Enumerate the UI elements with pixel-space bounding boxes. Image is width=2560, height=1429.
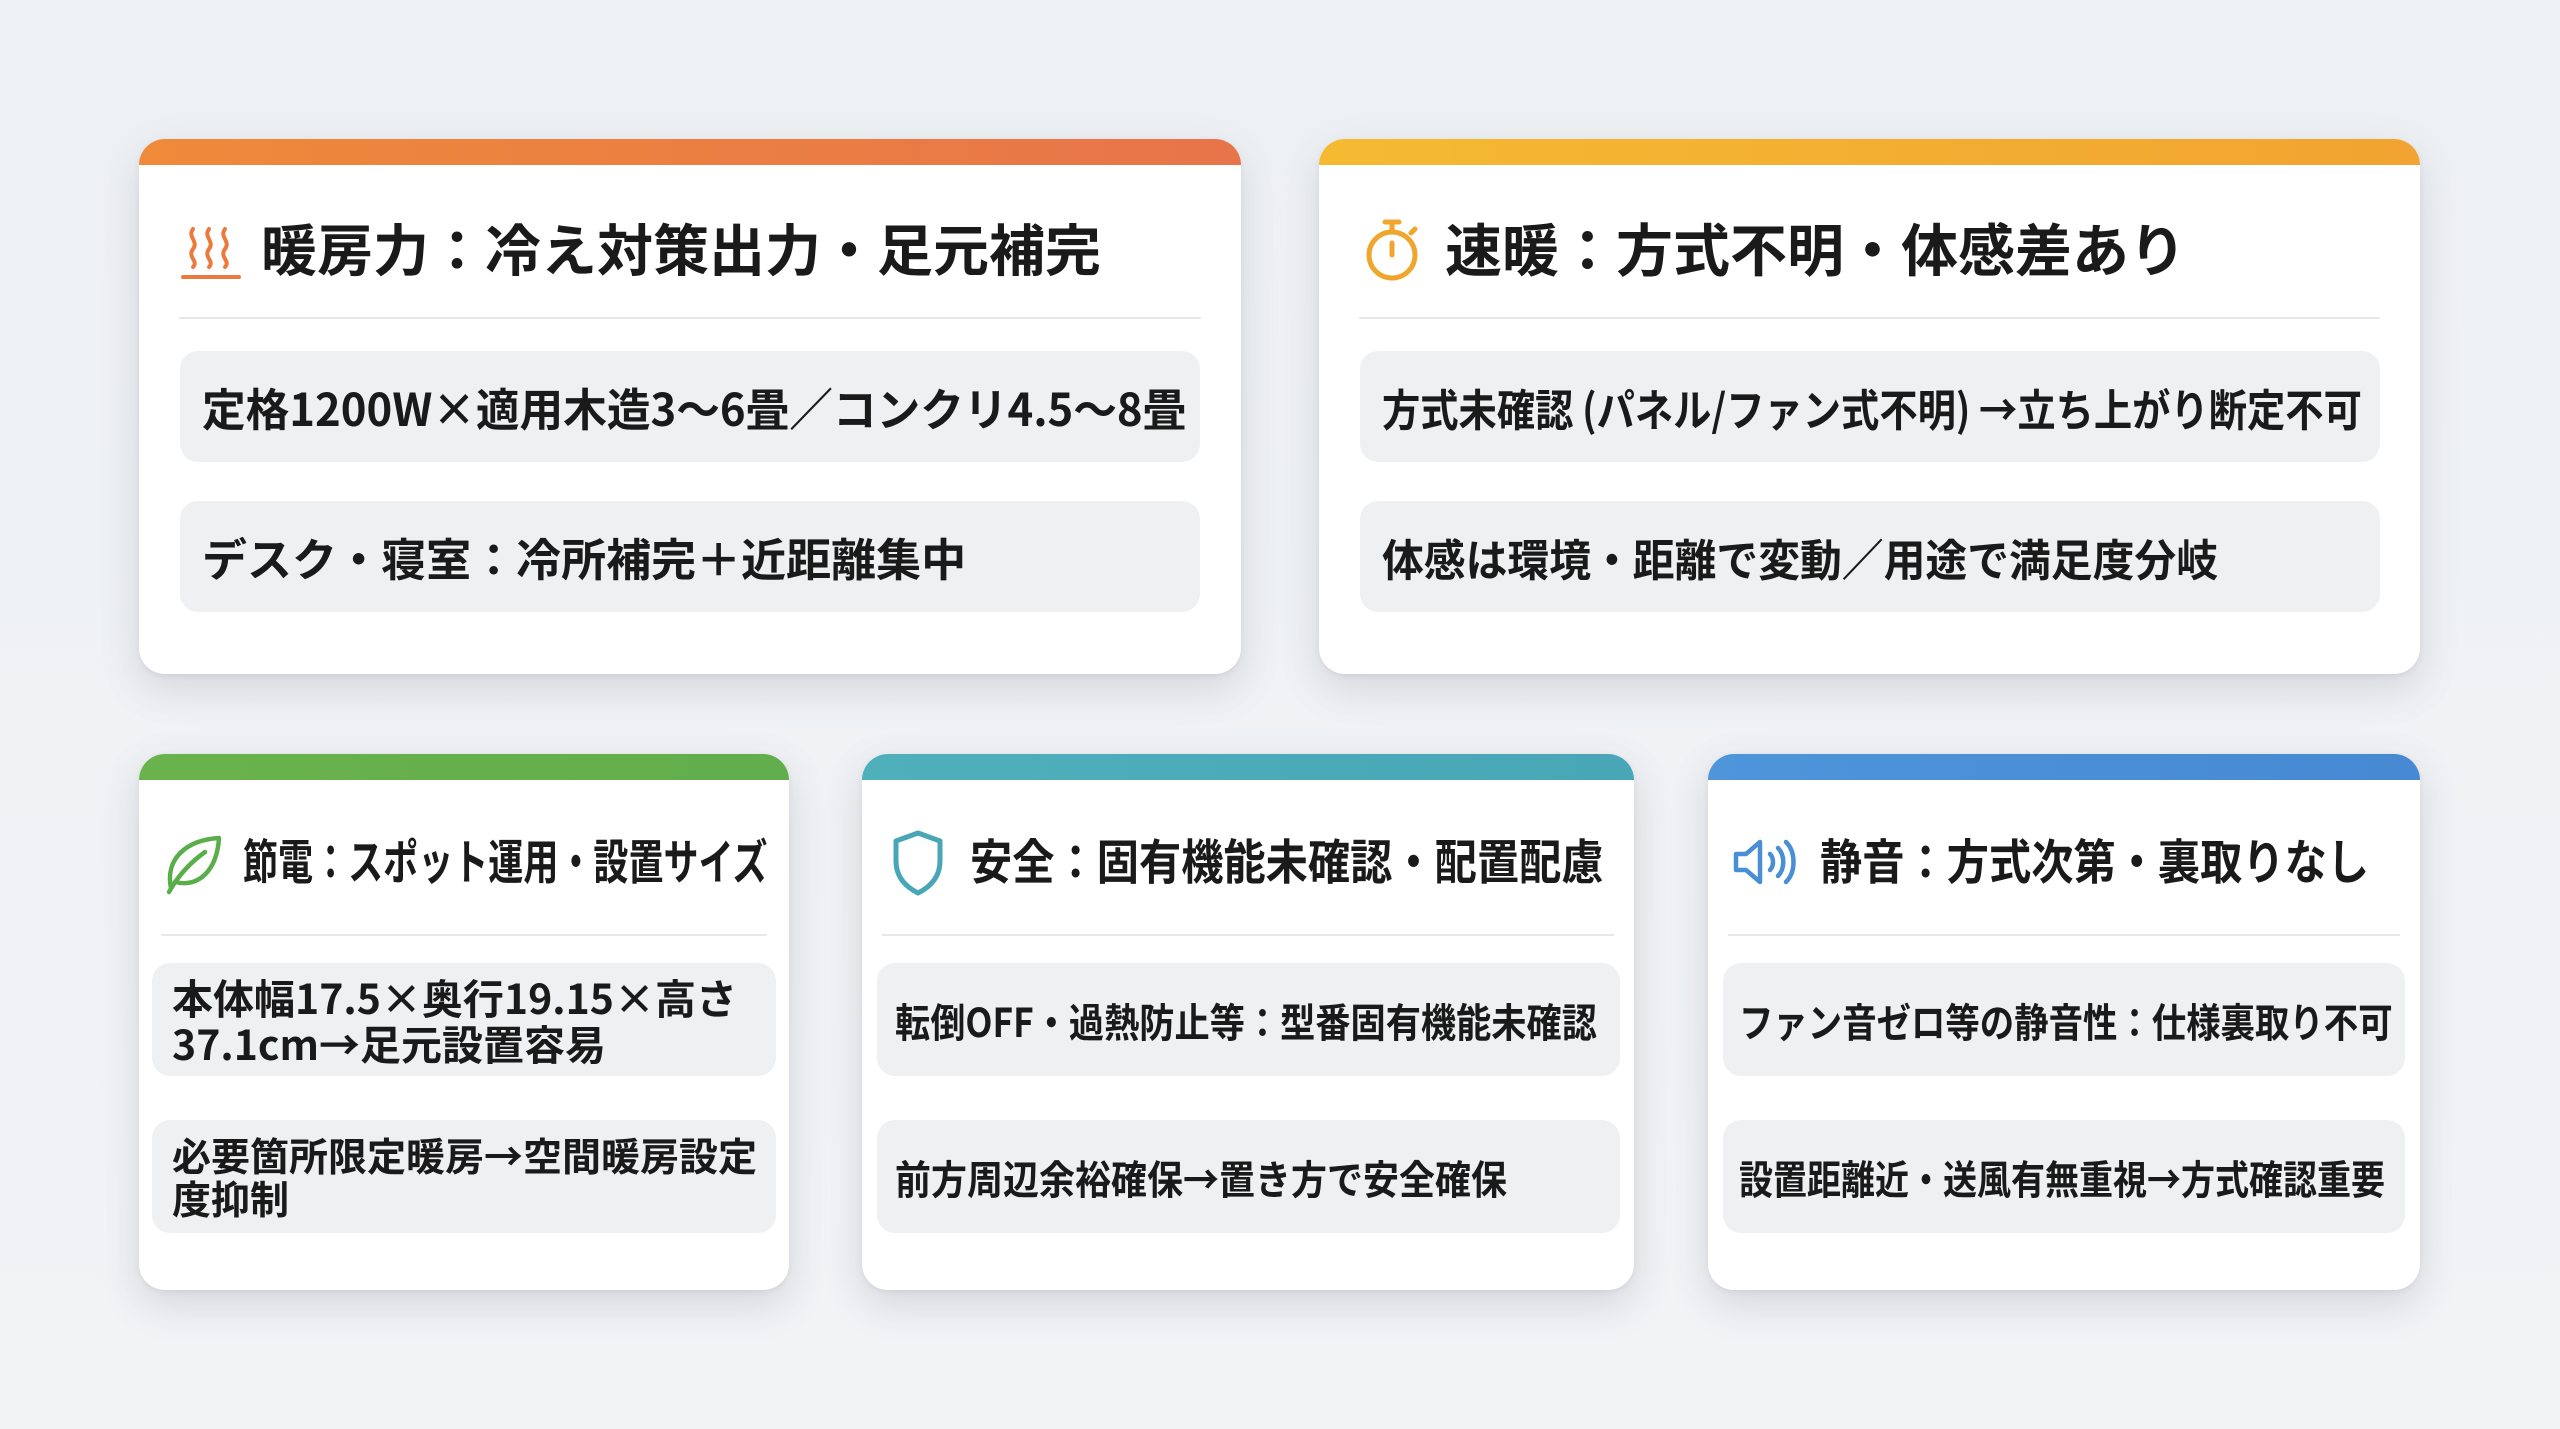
text block: method unknown: [1360, 351, 2380, 462]
panel: quietness: [1708, 754, 2420, 1290]
text block: dimensions: 本体幅17.5×奥行19.15×高さ: [172, 966, 737, 1026]
icon: heat waves: [181, 226, 241, 279]
text block: limited heating: [152, 1120, 776, 1233]
text block: perceived: 体感は環境・距離で変動／用途で満足度分岐: [1382, 536, 2218, 586]
icon: shield: [894, 830, 942, 896]
icon: stopwatch: [1366, 220, 1418, 280]
text block: distance: 設置距離近・送風有無重視→方式確認重要: [1739, 1148, 2385, 1206]
panel: quick heating: [1319, 139, 2420, 674]
text block: limited heating: 必要箇所限定暖房→空間暖房設定: [172, 1127, 757, 1183]
heading: 安全：固有機能未確認・配置配慮: [970, 837, 1604, 890]
icon: speaker: [1734, 840, 1796, 884]
text block: perceived: [1360, 501, 2380, 612]
text block: features: [877, 963, 1620, 1076]
icon: leaf: [166, 836, 222, 894]
text block: dimensions: [152, 963, 776, 1076]
text block: limited heating: 度抑制: [172, 1170, 289, 1226]
heading: 静音：方式次第・裏取りなし: [1820, 837, 2369, 890]
heading: 速暖：方式不明・体感差あり: [1445, 220, 2186, 284]
text block: dimensions: 37.1cm→足元設置容易: [172, 1012, 606, 1072]
text block: usage: デスク・寝室：冷所補完＋近距離集中: [202, 535, 966, 586]
text block: placement: 前方周辺余裕確保→置き方で安全確保: [895, 1148, 1507, 1206]
text block: distance: [1723, 1120, 2405, 1233]
text block: fan noise: [1723, 963, 2405, 1076]
heading: 暖房力：冷え対策出力・足元補完: [261, 220, 1101, 282]
text block: fan noise: ファン音ゼロ等の静音性：仕様裏取り不可: [1739, 990, 2393, 1048]
text block: placement: [877, 1120, 1620, 1233]
panel: heating power: [139, 139, 1241, 674]
text block: rating: 定格1200W×適用木造3～6畳／コンクリ4.5～8畳: [202, 374, 1186, 439]
heading: 節電：スポット運用・設置サイズ: [243, 837, 768, 890]
text block: usage: [180, 501, 1200, 612]
text block: rating: [180, 351, 1200, 462]
text block: method unknown: 方式未確認 (パネル/ファン式不明) →立ち上がり断定不可: [1382, 374, 2362, 438]
text block: features: 転倒OFF・過熱防止等：型番固有機能未確認: [895, 990, 1597, 1048]
panel: safety: [862, 754, 1634, 1290]
panel: power saving: [139, 754, 789, 1290]
